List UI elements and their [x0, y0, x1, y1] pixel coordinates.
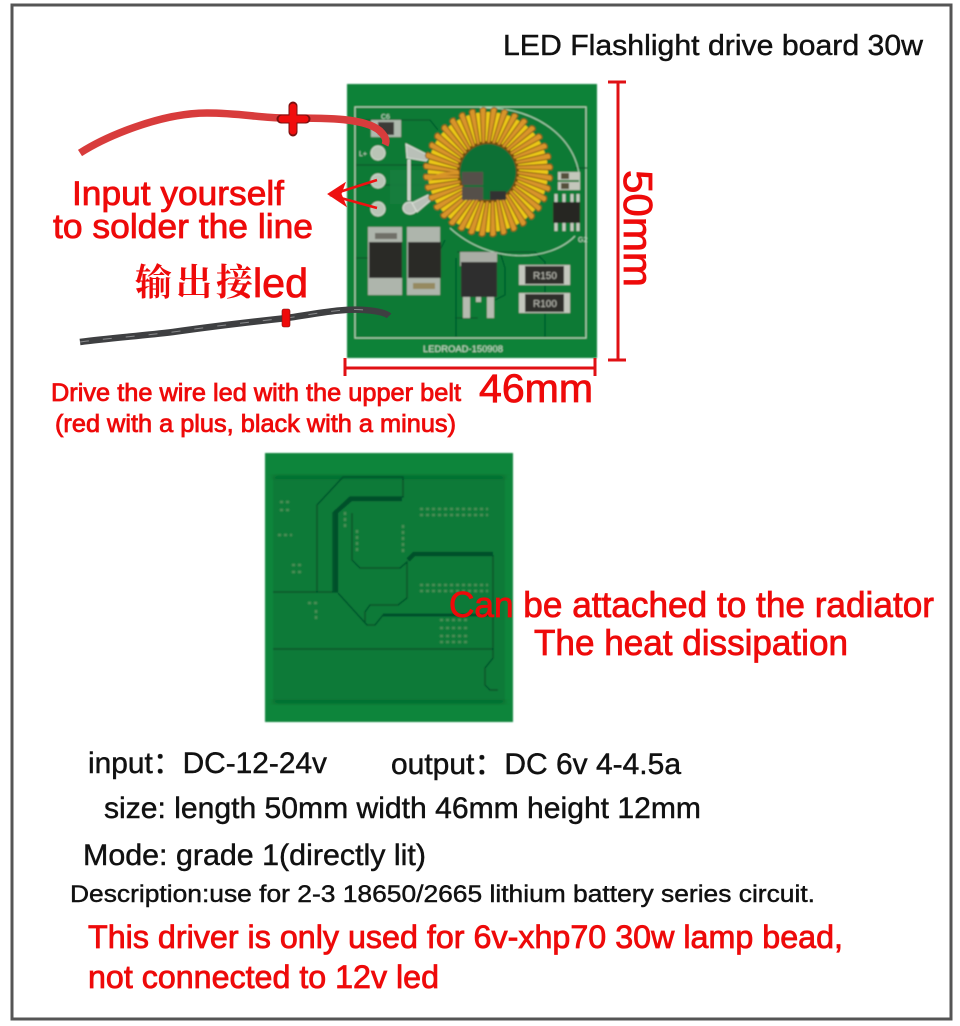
resistor R100: [519, 293, 570, 313]
plus marker: [281, 106, 306, 132]
label: to solder the line: to solder the line: [53, 208, 313, 246]
spec: size: size: length 50mm width 46mm height 12mm: [104, 792, 701, 825]
small diodes: [558, 172, 580, 190]
spec: mode: Mode: grade 1(directly lit): [83, 839, 426, 872]
toroid inductor: [423, 107, 553, 237]
resistor R150: R150: [533, 271, 557, 282]
MOSFET D1: [407, 227, 441, 295]
front circuit board photo: [347, 84, 597, 358]
rear via clusters: [278, 502, 488, 642]
label: input yourself: Input yourself: [72, 175, 285, 213]
inductor lead tabs: [403, 144, 431, 214]
resistor R150: [519, 265, 570, 285]
pointer arrows: [328, 180, 377, 208]
label: output to led: led: [253, 260, 308, 306]
resistor R100: R100: [533, 299, 557, 310]
radiator note line 1: Can be attached to the radiator: [449, 584, 934, 625]
height dimension line: [608, 82, 626, 360]
spec: description: Description:use for 2-3 18650/2665 lithium battery series circuit.: [70, 881, 815, 908]
solder pads: [371, 146, 385, 216]
board substrate: [347, 84, 597, 358]
spec: output: output：DC 6v 4-4.5a: [391, 748, 682, 781]
label: output to led: [135, 252, 308, 306]
minus marker: [282, 309, 290, 327]
radiator note line 2: The heat dissipation: [534, 622, 848, 663]
MOSFET D2: [368, 227, 402, 295]
width dimension line: [345, 358, 595, 376]
label: output to led: 输出接: [135, 252, 255, 306]
coil lead: [428, 173, 459, 180]
46mm label: 46mm: [479, 367, 593, 411]
rear traces: [273, 477, 498, 690]
components inside core: [462, 172, 483, 185]
title: LED Flashlight drive board 30w: [503, 30, 924, 62]
transistor Q1: [460, 252, 497, 318]
rear circuit board photo: [265, 453, 513, 722]
wire note line 1: Drive the wire led with the upper belt: [51, 379, 461, 407]
copper traces: [356, 120, 587, 337]
silk screen arc: [450, 108, 580, 256]
wire note line 2: (red with a plus, black with a minus): [55, 410, 456, 438]
board marking: LEDROAD-150908: [423, 344, 503, 354]
rear thick traces: [336, 499, 493, 615]
pad labels: L+: [359, 151, 367, 158]
capacitor C6: [371, 114, 401, 137]
via field: [390, 170, 430, 204]
red input wire: [80, 113, 386, 153]
winding: [423, 107, 553, 237]
50mm label: 50mm: [615, 170, 661, 287]
warning line 2: not connected to 12v led: [88, 959, 439, 995]
capacitor C6: C6: [381, 114, 390, 121]
rear substrate: [265, 453, 513, 722]
black output wire: [80, 310, 389, 342]
warning line 1: This driver is only used for 6v-xhp70 30w lamp bead,: [88, 919, 843, 955]
spec: input: input：DC-12-24v: [88, 747, 327, 780]
IC G2: [553, 194, 587, 244]
IC G2: G2: [578, 237, 587, 244]
